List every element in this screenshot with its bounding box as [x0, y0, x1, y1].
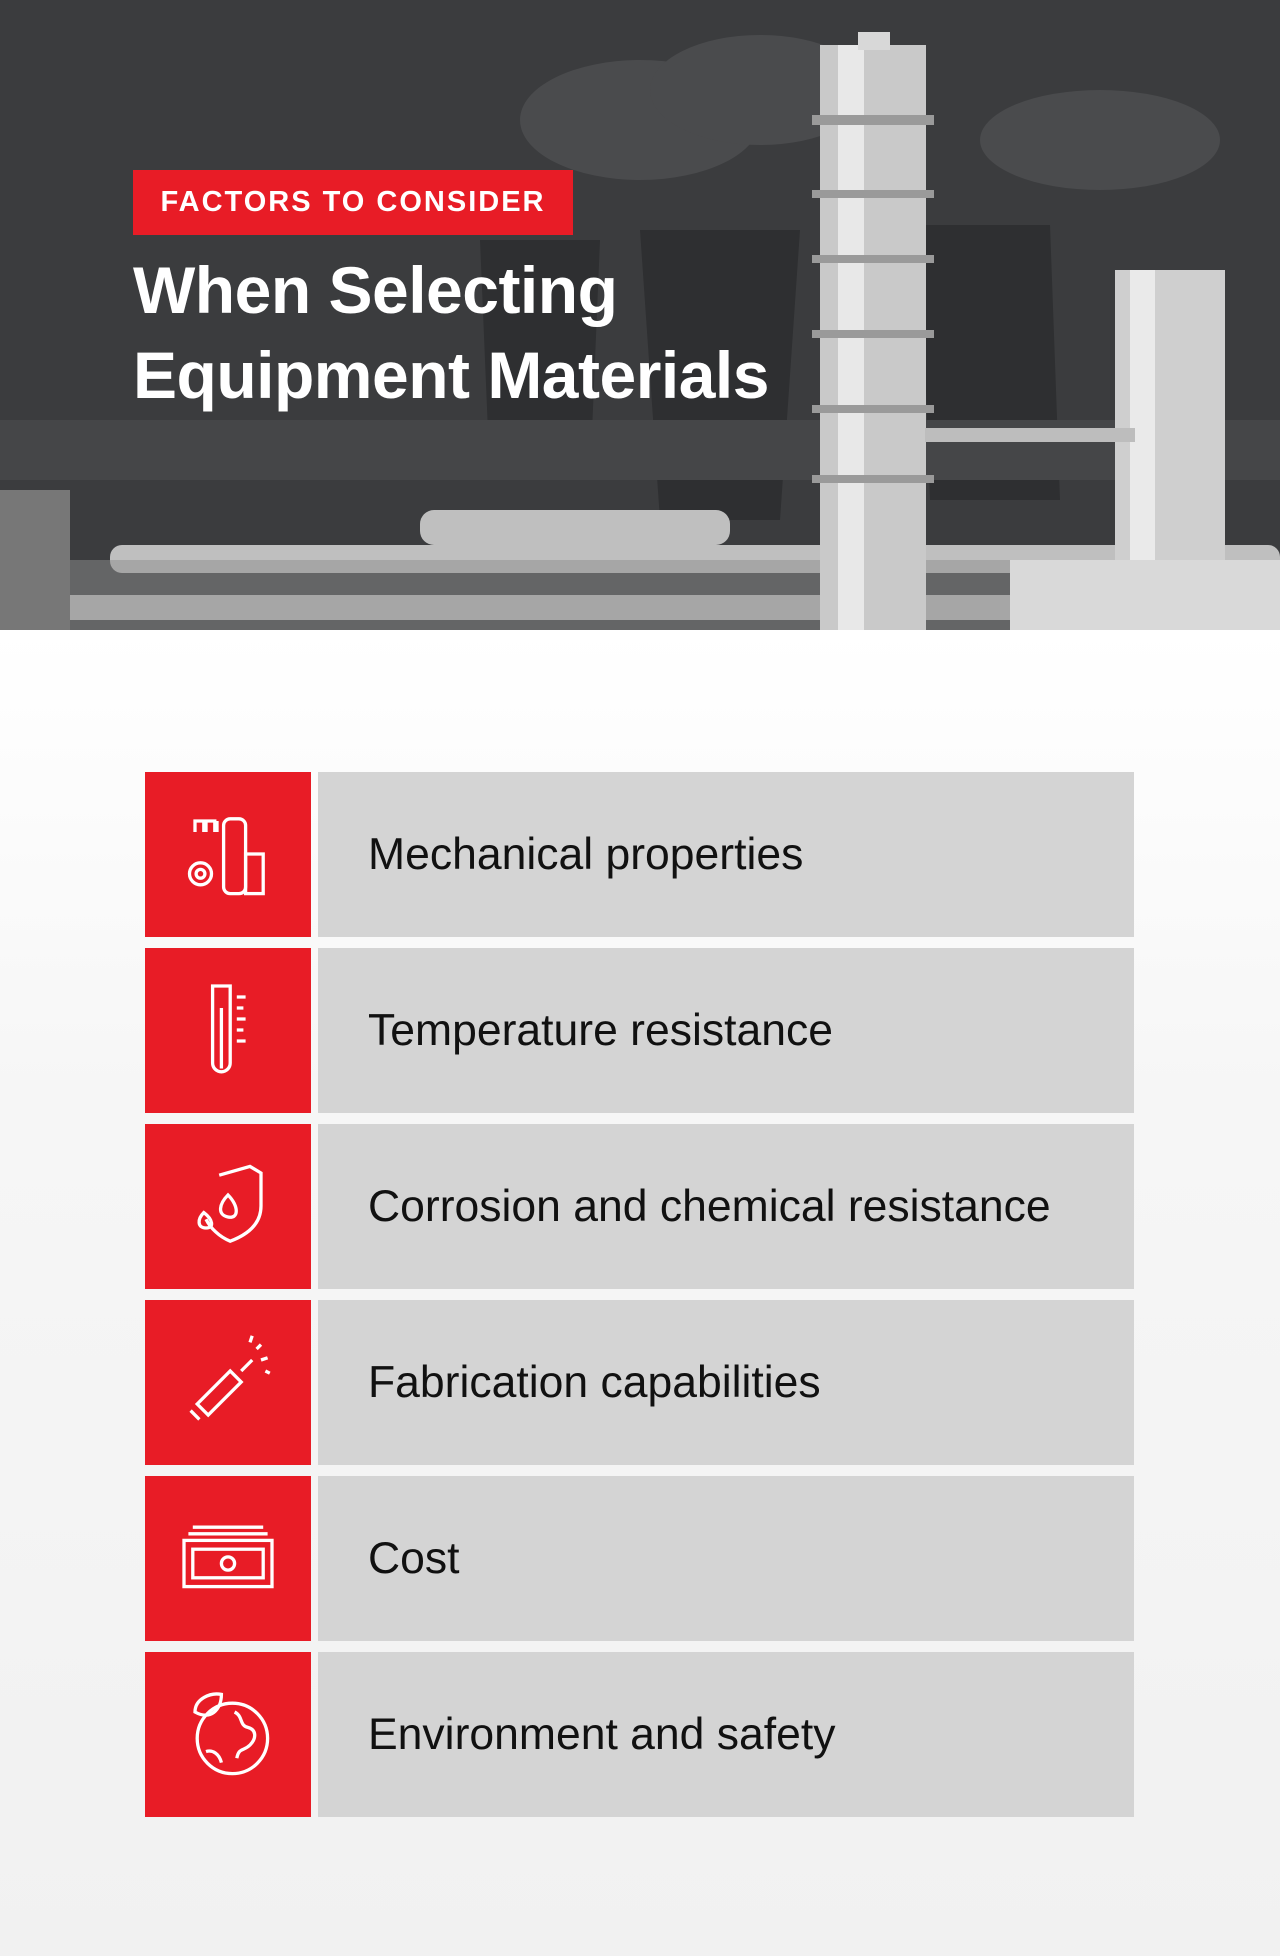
title: When Selecting: [133, 253, 617, 327]
label: [318, 948, 1134, 1113]
title: Equipment Materials: [133, 338, 769, 412]
label: Temperature resistance: [368, 1006, 833, 1055]
row: fabrication: [145, 1300, 1134, 1465]
label: Cost: [368, 1534, 460, 1583]
tag: factors to consider: [133, 170, 573, 235]
label: [318, 1652, 1134, 1817]
icon: globe with leaf: [145, 1652, 311, 1817]
label: [318, 1124, 1134, 1289]
label: [318, 1476, 1134, 1641]
label: Corrosion and chemical resistance: [368, 1182, 1051, 1231]
icon: shield with drops: [145, 1124, 311, 1289]
chimney: [812, 32, 934, 630]
label: Fabrication capabilities: [368, 1358, 821, 1407]
icon: welding torch: [145, 1300, 311, 1465]
icon: machinery: [145, 772, 311, 937]
row: temperature resistance: [145, 948, 1134, 1113]
title: [133, 253, 769, 412]
label: [318, 1300, 1134, 1465]
row: environment and safety: [145, 1652, 1134, 1817]
row: corrosion: [145, 1124, 1134, 1289]
icon: thermometer: [145, 948, 311, 1113]
row: cost: [145, 1476, 1134, 1641]
label: Environment and safety: [368, 1710, 836, 1759]
row: mechanical properties: [145, 772, 1134, 937]
label: [318, 772, 1134, 937]
header background: [0, 0, 1280, 630]
label: Mechanical properties: [368, 830, 803, 879]
tag: factors to consider: FACTORS TO CONSIDER: [161, 186, 545, 218]
icon: banknote: [145, 1476, 311, 1641]
